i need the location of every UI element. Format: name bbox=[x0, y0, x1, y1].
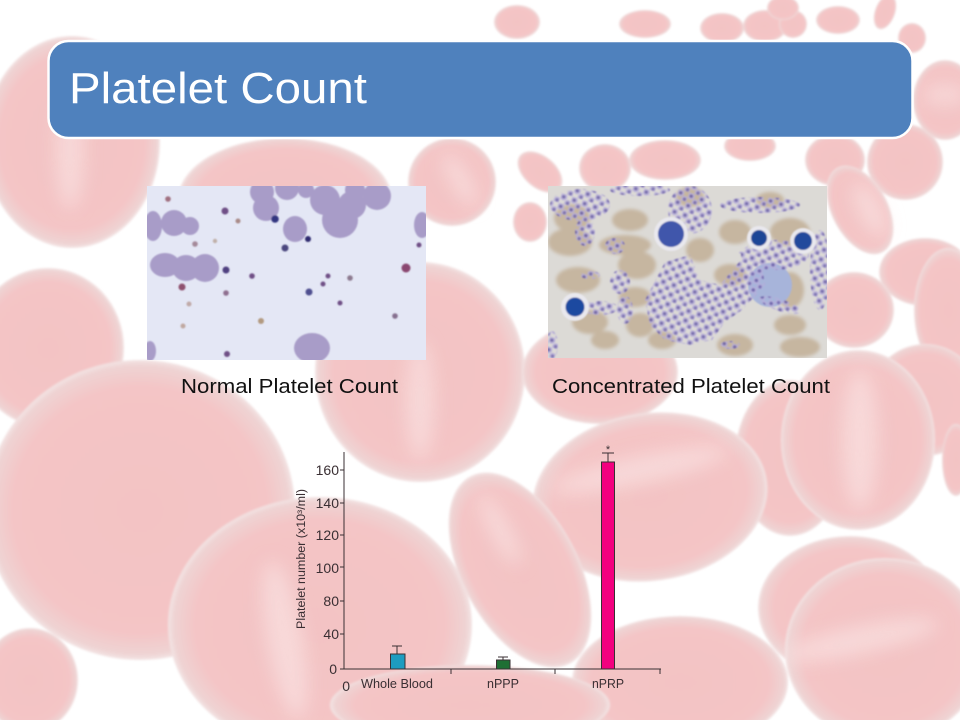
bar chart: platelet number bbox=[296, 444, 661, 694]
y axis labels: 140 bbox=[316, 495, 339, 511]
red cell clusters bbox=[144, 176, 430, 363]
y axis labels: 160 bbox=[316, 462, 339, 478]
x axis labels: nPPP bbox=[487, 677, 519, 691]
bar: nPPP bbox=[496, 657, 510, 669]
axes and ticks bbox=[340, 452, 661, 674]
caption: concentrated platelet count: Concentrated Platelet Count bbox=[552, 376, 830, 398]
title banner bbox=[48, 41, 912, 138]
y axis labels bbox=[316, 462, 350, 694]
photo: concentrated platelet count smear bbox=[546, 184, 830, 359]
y axis labels: 100 bbox=[316, 560, 339, 576]
bar: Whole Blood bbox=[390, 646, 405, 669]
x axis labels: nPRP bbox=[592, 677, 624, 691]
title: Platelet Count bbox=[69, 64, 367, 113]
caption: normal platelet count: Normal Platelet Count bbox=[181, 376, 398, 398]
y axis labels: 80 bbox=[323, 593, 339, 609]
x axis labels bbox=[361, 677, 624, 691]
bar: nPRP: * bbox=[606, 444, 611, 456]
platelet masses bbox=[546, 184, 830, 359]
bar: nPRP bbox=[602, 444, 614, 669]
y axis labels: 0 bbox=[342, 678, 350, 694]
platelets bbox=[165, 196, 421, 357]
white blood cells bbox=[654, 217, 688, 251]
y axis title: Platelet number (x10³/ml) bbox=[296, 489, 308, 629]
y axis labels: 0 bbox=[329, 661, 337, 677]
y axis labels: 40 bbox=[323, 626, 339, 642]
photo: normal platelet count smear bbox=[144, 176, 430, 363]
pale stain patch bbox=[748, 263, 792, 307]
x axis labels: Whole Blood bbox=[361, 677, 433, 691]
tan red cells bbox=[548, 187, 820, 357]
y axis labels: 120 bbox=[316, 527, 339, 543]
